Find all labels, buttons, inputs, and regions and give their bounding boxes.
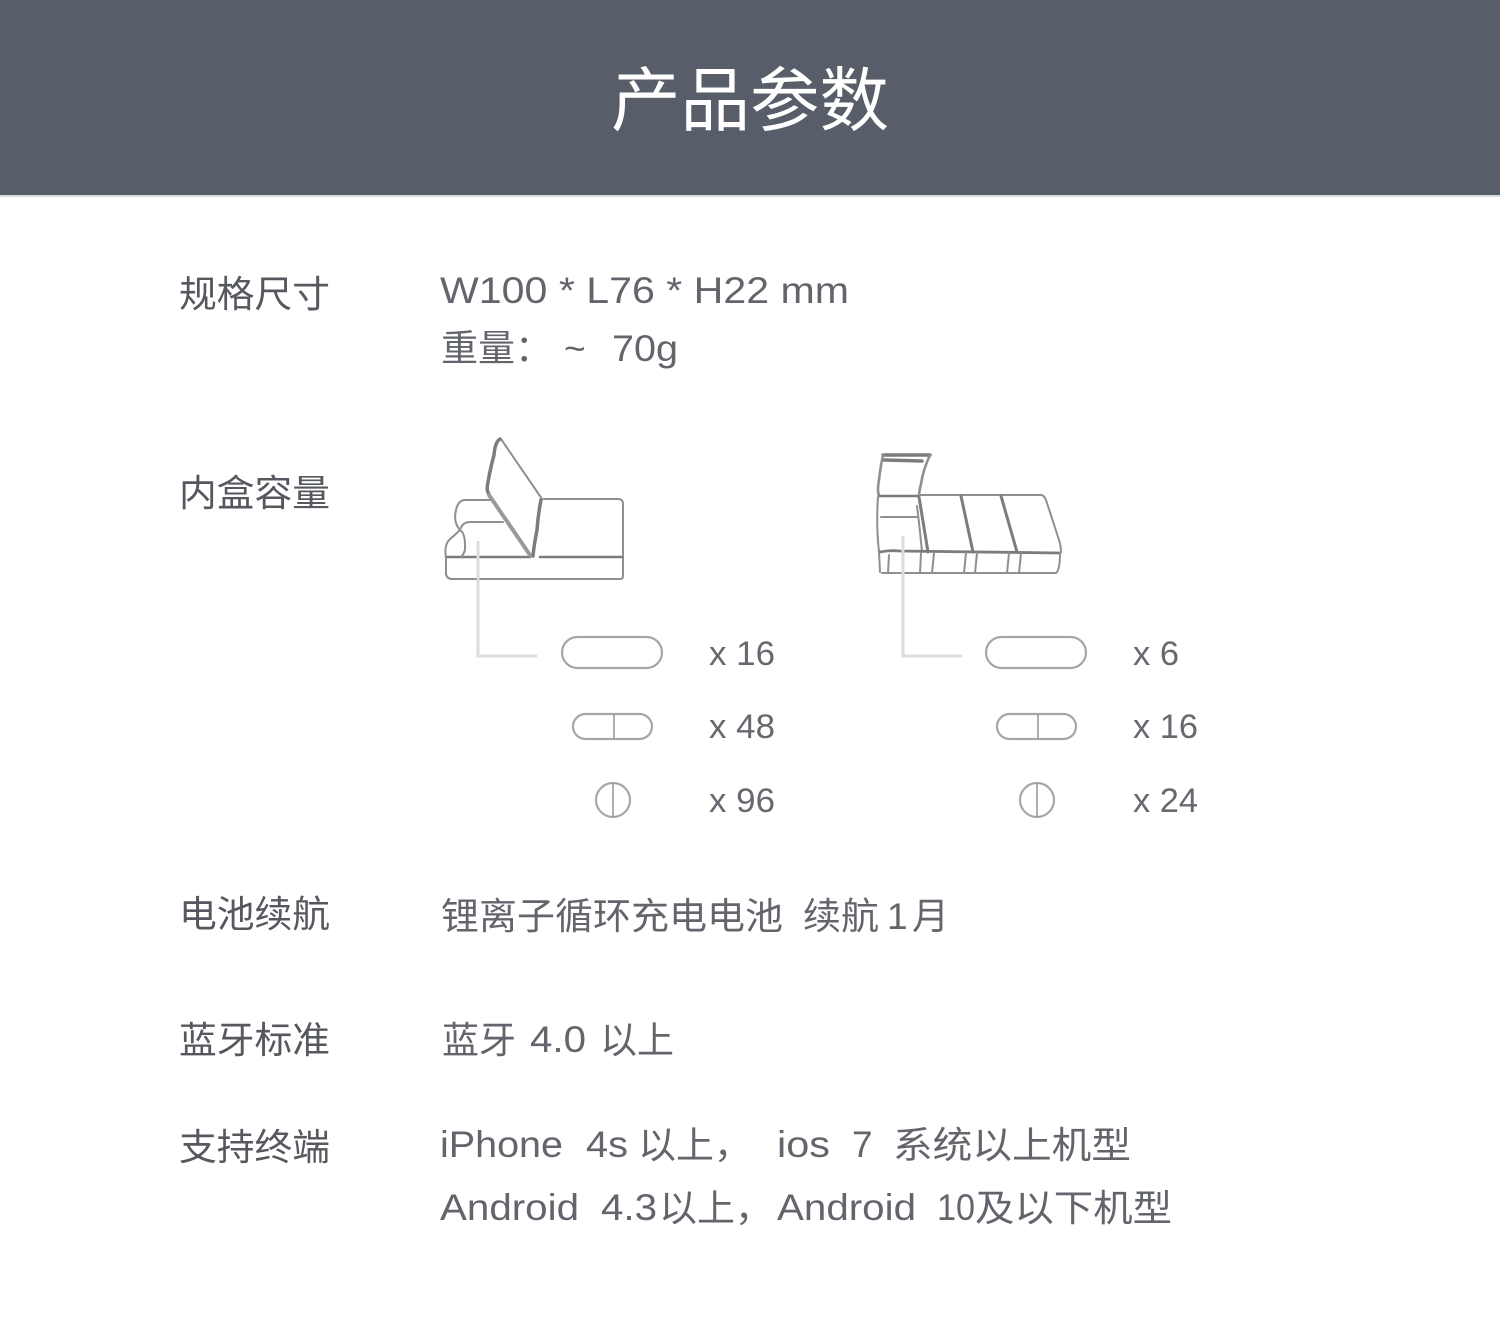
icon: open multi-compartment box [877,455,1061,573]
panel: left box capacity [445,439,775,820]
heading: dimensions: 规格尺寸 [179,264,330,318]
text: iOS devices: ios [777,1124,830,1165]
icon: medium capsule [997,714,1076,739]
text: Android devices: 4.3 [601,1187,657,1228]
leader line [478,541,537,656]
icon: medium capsule [573,714,652,739]
header banner [0,0,1500,197]
text: iOS devices: iPhone [440,1124,563,1165]
text: battery value [441,886,949,940]
icon: large pill [986,637,1086,668]
text: Android devices: 以上 [659,1178,735,1232]
text: iOS devices: ， [714,1115,751,1169]
icon: large pill [562,637,662,668]
text: Android devices [440,1178,1172,1232]
text: iOS devices: 4s [586,1124,628,1165]
heading: inner box capacity: 内盒容量 [179,463,330,517]
text: bluetooth value: 以上 [600,1010,674,1064]
text: weight value [441,318,678,372]
panel: right box capacity [877,455,1198,820]
text: weight value: ~ [564,328,586,369]
text: battery value: 续航 [803,886,879,940]
heading: bluetooth standard: 蓝牙标准 [179,1010,330,1064]
text: Android devices: 及以下机型 [975,1178,1172,1232]
count: medium capsule: x 48 [709,708,775,746]
title: 产品参数 [611,45,889,146]
text: weight value: 重量 [441,318,515,372]
count: medium capsule: x 16 [1133,708,1198,746]
count: large pill: x 16 [709,635,775,673]
heading: battery life: 电池续航 [179,884,330,938]
text: weight value: ： [515,318,552,372]
text: Android devices: Android [440,1187,579,1228]
text: battery value: 月 [912,886,949,940]
count: large pill: x 6 [1133,635,1179,673]
count: round tablet: x 24 [1133,782,1198,820]
text: iOS devices: 系统以上机型 [893,1115,1131,1169]
text: weight value: 70g [612,328,678,369]
text: dimensions value: W100 * L76 * H22 mm [440,270,849,311]
text: Android devices: 10 [937,1187,975,1228]
icon: open two-compartment box [445,439,623,579]
heading: supported devices: 支持终端 [179,1117,330,1171]
text: iOS devices: 以上 [638,1115,714,1169]
text: iOS devices [440,1115,1131,1169]
text: bluetooth value: 蓝牙 [442,1010,516,1064]
text: battery value: 1 [887,896,908,937]
text: bluetooth value [442,1010,674,1064]
leader line [903,536,962,656]
icon: round tablet [596,783,630,817]
icon: round tablet [1020,783,1054,817]
text: Android devices: ， [735,1178,772,1232]
text: bluetooth value: 4.0 [530,1019,586,1060]
count: round tablet: x 96 [709,782,775,820]
text: battery value: 锂离子循环充电电池 [441,886,783,940]
text: iOS devices: 7 [852,1124,873,1165]
text: Android devices: Android [777,1187,916,1228]
